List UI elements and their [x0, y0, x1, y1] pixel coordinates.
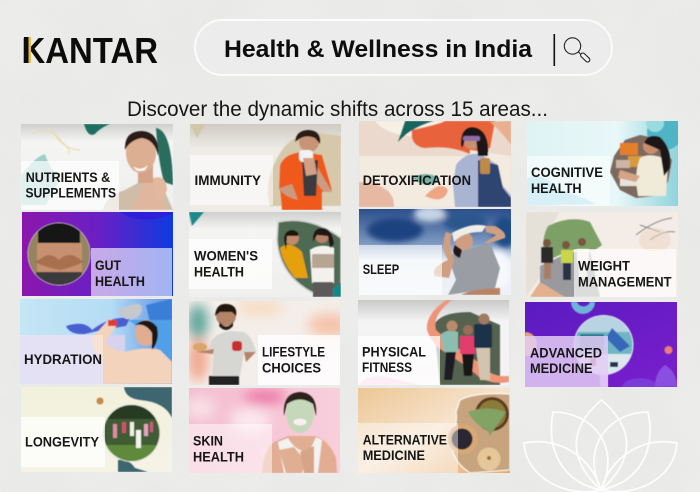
label: LIFESTYLE	[262, 344, 325, 360]
icon: magnifier	[564, 38, 591, 63]
label: DETOXIFICATION	[363, 172, 471, 188]
search bar title	[195, 20, 612, 75]
label box	[527, 156, 610, 206]
label: CHOICES	[262, 360, 321, 376]
label box	[525, 336, 608, 387]
label: FITNESS	[362, 359, 412, 375]
card: Weight Management	[526, 212, 678, 297]
card: Gut Health	[22, 212, 173, 296]
label: NUTRIENTS &	[26, 169, 110, 185]
card: Physical Fitness	[358, 300, 509, 385]
logo: Kantar: KANTAR	[22, 30, 158, 71]
card: Women's Health	[189, 212, 341, 297]
label: ALTERNATIVE	[363, 431, 447, 447]
card: Detoxification	[359, 121, 511, 207]
label: SKIN	[193, 433, 223, 449]
label: MANAGEMENT	[578, 274, 672, 290]
label: HEALTH	[193, 449, 244, 465]
label: SUPPLEMENTS	[26, 185, 116, 201]
label: WOMEN'S	[194, 248, 258, 264]
label box	[358, 336, 440, 385]
label: HYDRATION	[24, 351, 102, 367]
card: Immunity	[190, 124, 341, 210]
label box	[91, 248, 172, 296]
label: PHYSICAL	[362, 344, 426, 360]
label box	[258, 335, 340, 385]
label box	[359, 245, 442, 295]
label box	[190, 155, 273, 205]
label: HEALTH	[531, 180, 582, 196]
label box	[21, 417, 105, 467]
card: Alternative Medicine	[358, 388, 510, 473]
heading: Health & Wellness in India	[224, 36, 533, 63]
card: Nutrients & Supplements	[21, 124, 173, 210]
label box	[189, 424, 272, 473]
label box	[574, 249, 676, 297]
icon: torso circle	[26, 222, 92, 286]
label: SLEEP	[363, 261, 399, 277]
label: WEIGHT	[578, 258, 630, 274]
label box	[20, 335, 103, 384]
label box	[189, 239, 272, 289]
card: Longevity	[21, 387, 172, 472]
subheading: Discover the dynamic shifts across 15 areas...	[127, 98, 548, 121]
label: IMMUNITY	[194, 172, 262, 188]
card: Skin Health	[184, 388, 340, 473]
card: Advanced Medicine	[525, 302, 677, 387]
label: ADVANCED	[530, 345, 602, 361]
label: MEDICINE	[363, 447, 425, 463]
label box	[21, 161, 119, 210]
card: Cognitive Health	[527, 121, 678, 206]
icon: lotus outline	[524, 400, 677, 492]
label: HEALTH	[194, 264, 244, 280]
card: Sleep	[359, 206, 517, 295]
label: MEDICINE	[530, 360, 592, 376]
label: GUT	[95, 257, 121, 273]
label: COGNITIVE	[531, 164, 603, 180]
card: Hydration	[20, 299, 172, 384]
label: LONGEVITY	[25, 434, 100, 450]
label: HEALTH	[95, 273, 145, 289]
label box	[358, 423, 458, 473]
card: Lifestyle Choices	[188, 300, 352, 385]
